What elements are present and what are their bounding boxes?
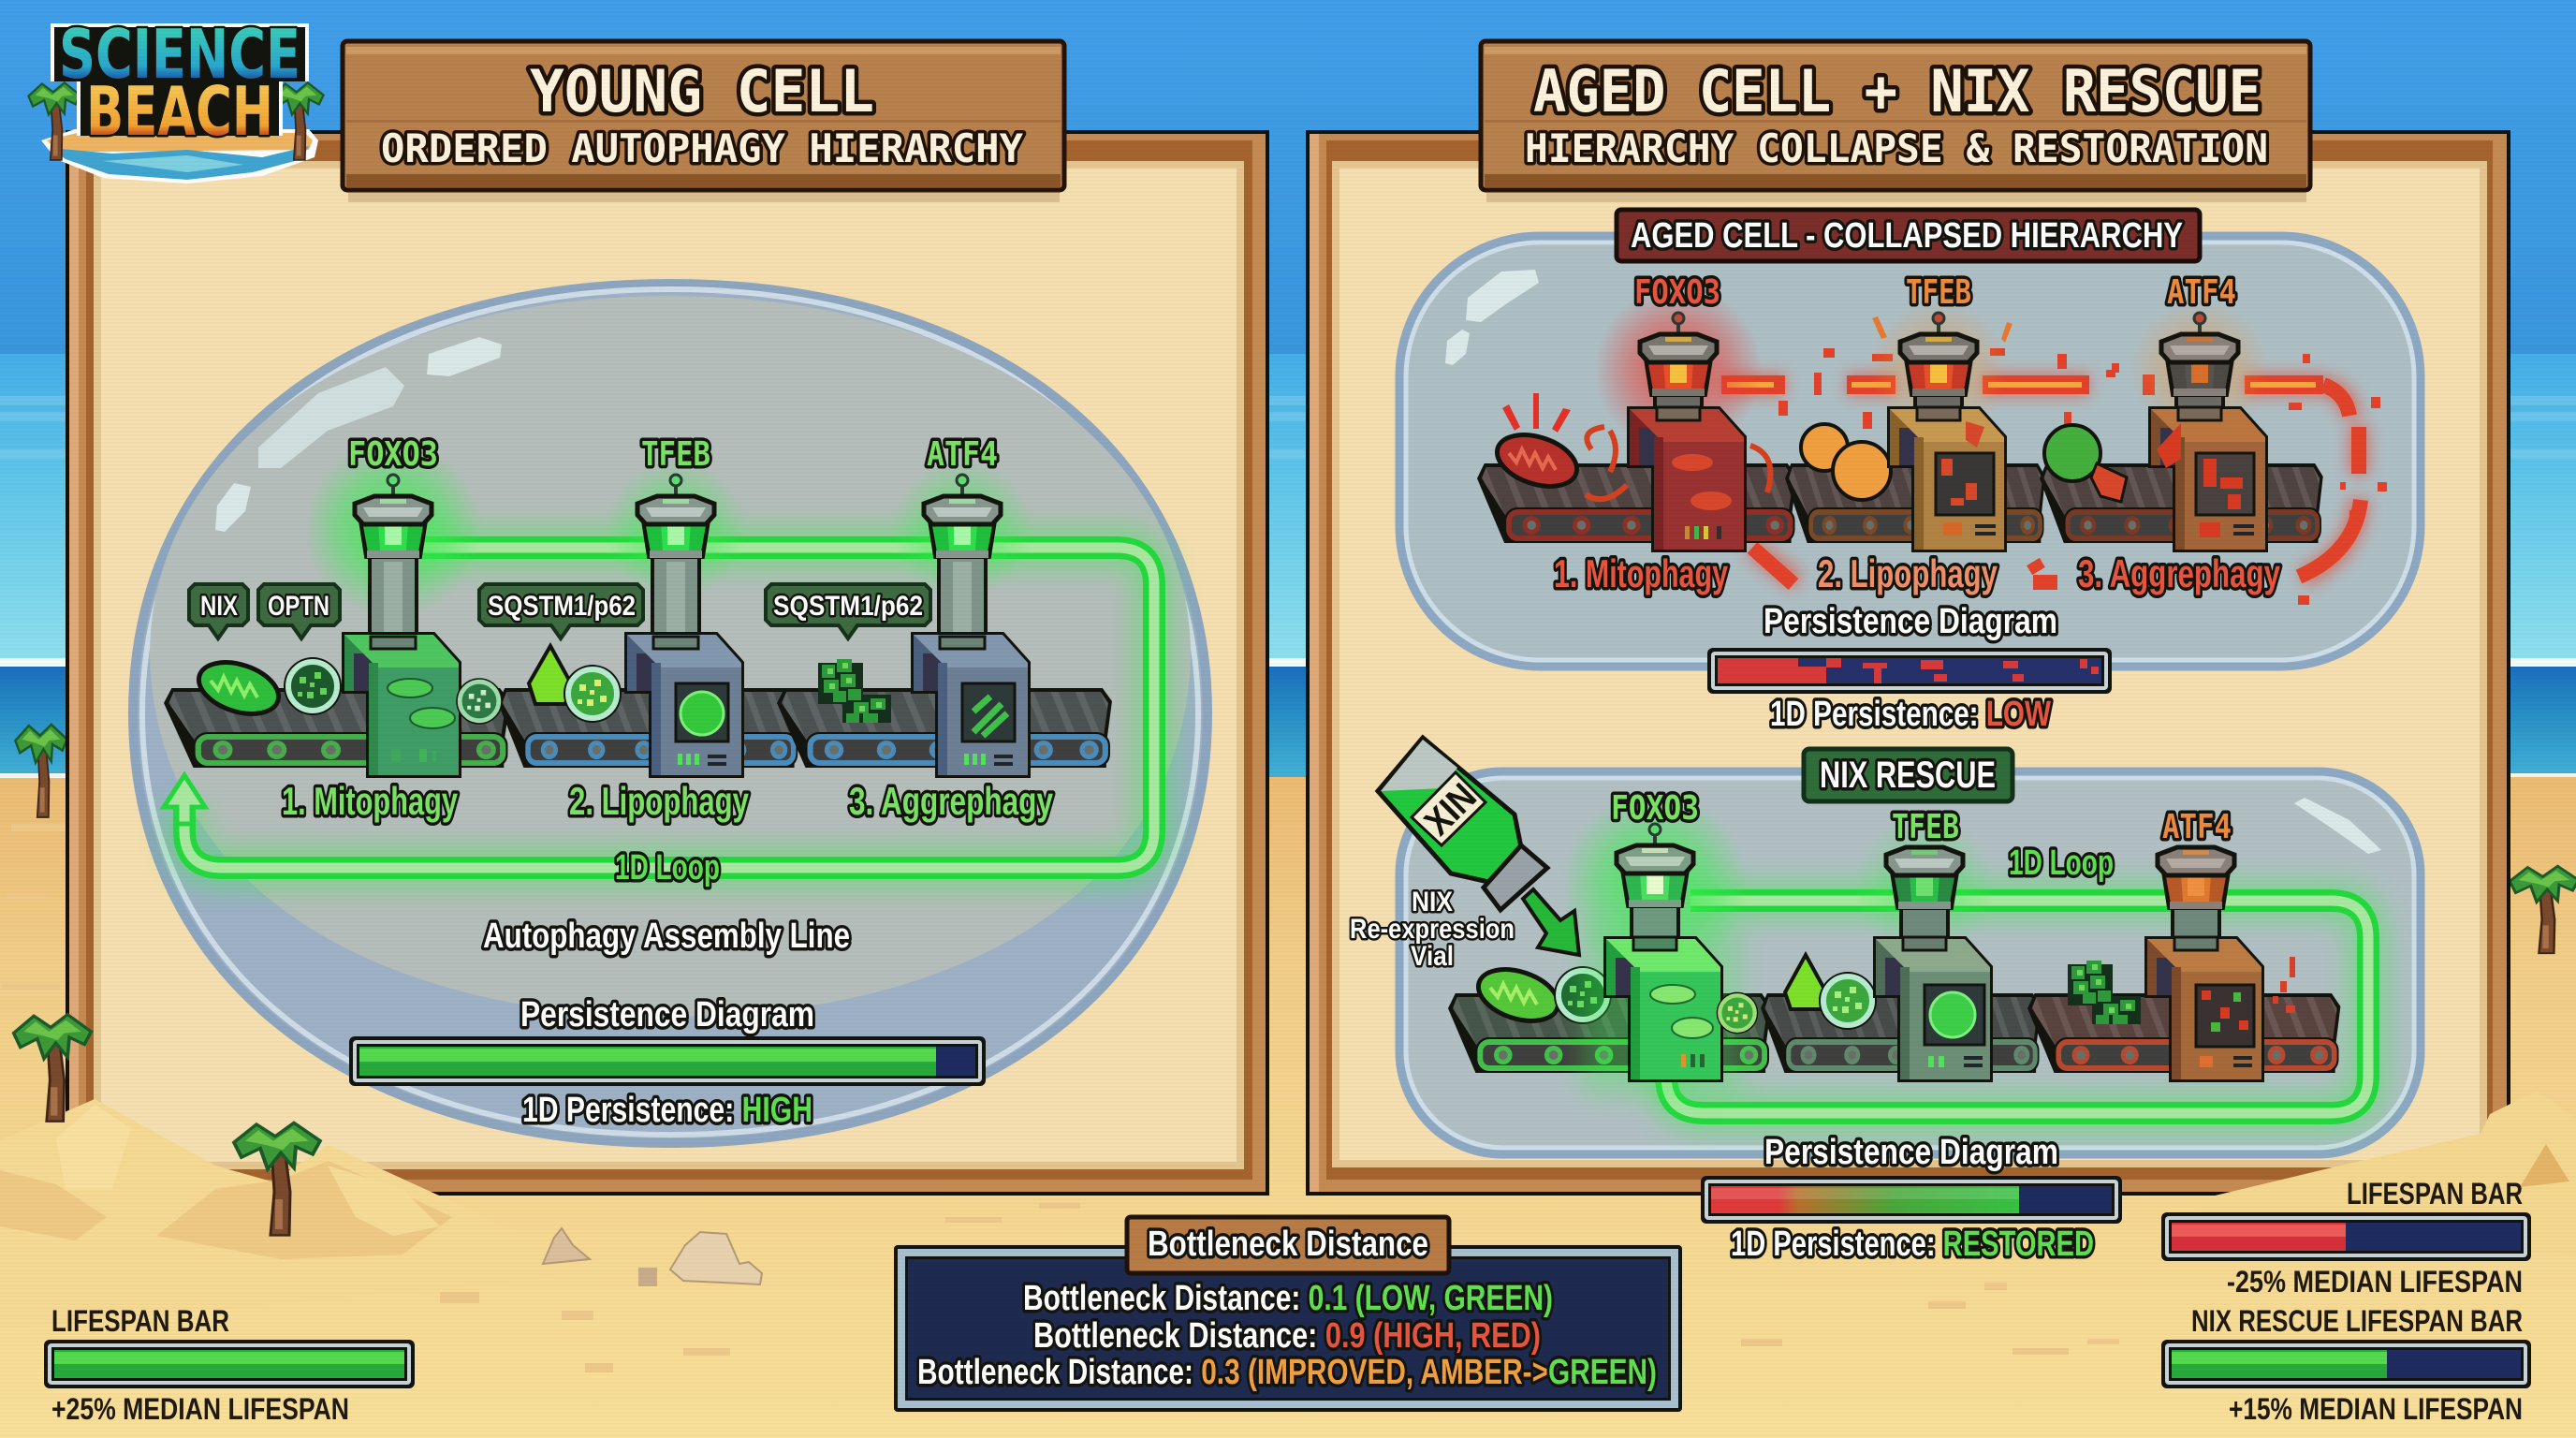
logo: Science Beach: BEACH: [86, 72, 273, 151]
label: assembly line: Autophagy Assembly Line: [483, 917, 850, 956]
alert marks: [1502, 393, 1571, 433]
aggregate cargo: [818, 659, 891, 723]
rescue 1D loop path: [1666, 901, 2368, 1113]
NIX rescue bubble: [1399, 771, 2421, 1154]
background: checker haze bands: [0, 396, 2576, 459]
conveyor: rescue mitophagy: [1448, 993, 1771, 1073]
conveyor: lipophagy: [498, 688, 799, 768]
parchment background: [1336, 165, 2483, 1164]
machine: rescue ATF4: [2147, 847, 2295, 1079]
label: 1D loop: 1D Loop: [615, 848, 720, 888]
lifespan: NIX rescue: [2161, 1304, 2531, 1426]
labels: aged transcription factors: [1634, 273, 2236, 312]
broken vesicle fragments: [1586, 427, 1770, 499]
bottleneck tab: [1127, 1217, 1449, 1273]
callout: SQSTM1/p62 aggrephagy: [766, 584, 930, 638]
orange lipid droplets: [1801, 424, 1891, 500]
persistence: rescue: 1D Persistence: RESTORED: [1731, 1225, 2094, 1264]
rescue aggregate: [2068, 961, 2141, 1024]
conveyor: aged lipophagy: [1785, 463, 2045, 543]
heading: NIX rescue plaque: NIX RESCUE: [1820, 755, 1996, 796]
heading: NIX rescue plaque: [1804, 749, 2012, 801]
labels: autophagy pathways: 2. Lipophagy: [569, 779, 749, 823]
labels: aged pathways: 2. Lipophagy: [1818, 551, 1998, 595]
conveyor: mitophagy: [164, 688, 510, 768]
background: sand: [0, 777, 2576, 1438]
rescue mitochondrion: [1471, 961, 1565, 1030]
heading plank: young cell: YOUNG CELL: [530, 57, 874, 125]
aged cell bubble: [1399, 236, 2421, 667]
labels: transcription factors: [348, 435, 998, 474]
damaged mitochondrion: [1490, 426, 1584, 495]
sparks: [2273, 957, 2295, 1013]
lifespan: young: LIFESPAN BAR: [51, 1304, 229, 1338]
labels: rescue transcription factors: FOXO3: [1611, 789, 1699, 828]
background: horizon glow: [0, 354, 2576, 661]
heading plank: young cell: ORDERED AUTOPHAGY HIERARCHY: [381, 125, 1024, 171]
lifespan: young: [44, 1304, 415, 1426]
logo plate: [51, 23, 309, 136]
persistence: rescue: [1701, 1133, 2122, 1264]
background: sea: [0, 667, 2576, 784]
conveyor: rescue lipophagy: [1761, 993, 2041, 1073]
rescue vesicle: [1554, 966, 1612, 1024]
sand dune: lower right: [2184, 1091, 2576, 1255]
heading: aged cell plaque: AGED CELL - COLLAPSED HIERARCHY: [1631, 216, 2183, 256]
conveyor: aggrephagy: [777, 688, 1112, 768]
labels: aged transcription factors: FOXO3: [1634, 273, 1720, 312]
lipid vesicle cargo: [564, 665, 622, 723]
background: sky: [0, 0, 2576, 354]
label: NIX re-expression vial: Vial: [1411, 941, 1454, 972]
background: sand ripples: [2, 824, 2119, 1372]
bottleneck tab: Bottleneck Distance: [1148, 1225, 1428, 1264]
labels: aged pathways: [1554, 551, 2280, 595]
vesicle cargo: [284, 657, 342, 715]
labels: aged transcription factors: ATF4: [2167, 273, 2236, 312]
background: shore foam: [0, 773, 2576, 778]
logo: Science Beach: SCIENCE: [59, 15, 300, 94]
callout: OPTN: OPTN: [268, 591, 329, 622]
machine: aged FOXO3: [1594, 286, 1763, 550]
persistence bar: low: [1707, 648, 2112, 694]
callout: OPTN: [258, 584, 340, 638]
logo palms: [28, 82, 80, 160]
logo island: [41, 129, 318, 183]
labels: autophagy pathways: 3. Aggrephagy: [849, 779, 1053, 823]
machine: TFEB lipophagy: [606, 459, 746, 775]
labels: aged pathways: 3. Aggrephagy: [2078, 551, 2280, 595]
label: persistence diagram: Persistence Diagram: [520, 995, 814, 1034]
persistence bar: high: [349, 1036, 986, 1086]
panel: aged cell and NIX rescue: [1306, 130, 2510, 1196]
machine: FOXO3 mitophagy: [304, 440, 503, 775]
labels: autophagy pathways: 1. Mitophagy: [282, 779, 458, 823]
lipid droplet cargo: [529, 646, 571, 704]
persistence: rescue: Persistence Diagram: [1764, 1133, 2058, 1172]
label: persistence diagram aged: Persistence Diagram: [1764, 602, 2057, 641]
rocks: [543, 1228, 762, 1286]
heading plank: aged cell + NIX rescue: [1481, 41, 2310, 202]
label: rescue 1D loop: 1D Loop: [2009, 844, 2114, 883]
machine: rescue TFEB: [1854, 814, 1995, 1079]
lifespan: young: +25% MEDIAN LIFESPAN: [51, 1392, 349, 1426]
label: NIX re-expression vial: NIX: [1412, 887, 1453, 917]
labels: rescue transcription factors: TFEB: [1892, 808, 1959, 846]
mitochondrion cargo: [192, 653, 285, 723]
conveyor: aged aggrephagy: [2040, 463, 2323, 543]
label: 1D persistence low: 1D Persistence: LOW: [1770, 695, 2051, 734]
vial cap: [1484, 845, 1547, 910]
lifespan: aged: [2161, 1177, 2531, 1299]
machine: aged ATF4: [2130, 300, 2270, 550]
NIX re-expression vial: [1378, 738, 1547, 910]
bottleneck distance panel: Bottleneck Distance: 0.3 (IMPROVED, AMBER->GREEN): [917, 1353, 1657, 1392]
labels: transcription factors: TFEB: [641, 435, 710, 474]
labels: rescue transcription factors: [1611, 789, 2232, 846]
vial body: [1378, 738, 1521, 882]
labels: aged transcription factors: TFEB: [1906, 273, 1971, 312]
callout: NIX: NIX: [200, 591, 238, 622]
labels: transcription factors: ATF4: [927, 435, 998, 474]
palm tree: left shore: [15, 725, 67, 817]
callout: SQSTM1/p62 lipophagy: [479, 584, 643, 638]
bottleneck distance panel: [894, 1217, 1682, 1412]
logo: Science Beach: [28, 15, 324, 183]
bottleneck distance panel: Bottleneck Distance: 0.1 (LOW, GREEN): [1023, 1279, 1553, 1318]
palm tree: right shore: [2510, 866, 2576, 953]
heading: aged cell plaque: [1617, 210, 2200, 261]
NIX re-expression vial: XIN: [1417, 776, 1485, 844]
callout: SQSTM1/p62 lipophagy: SQSTM1/p62: [488, 591, 636, 622]
vial label: [1412, 772, 1486, 845]
heading plank: aged cell + NIX rescue: HIERARCHY COLLAPSE & RESTORATION: [1525, 125, 2268, 171]
membrane bubble: [133, 284, 1208, 1143]
aggregate with red fragment: [2044, 425, 2127, 502]
panel: young cell: [66, 130, 1269, 1196]
background: foam line: [0, 658, 2576, 667]
labels: transcription factors: FOXO3: [348, 435, 438, 474]
lifespan: aged: -25% MEDIAN LIFESPAN: [2227, 1265, 2523, 1299]
heading plank: young cell: [343, 41, 1064, 202]
machine: ATF4 aggrephagy: [892, 459, 1032, 775]
rescue lipid droplet: [1785, 955, 1826, 1009]
hazard sparks: [1872, 316, 2012, 343]
conveyor: aged mitophagy: [1477, 463, 1796, 543]
arrow: vial into machine: [1523, 889, 1579, 955]
vial air gap: [1381, 740, 1457, 791]
label: NIX re-expression vial: Re-expression: [1350, 914, 1515, 945]
callout: SQSTM1/p62 aggrephagy: SQSTM1/p62: [773, 591, 923, 622]
machine: rescue FOXO3: [1561, 791, 1758, 1095]
label: NIX re-expression vial: [1350, 887, 1515, 972]
wooden frame: [66, 130, 1269, 1196]
1D loop glow path: [164, 548, 1154, 868]
label: 1D persistence high: 1D Persistence: HIGH: [522, 1091, 812, 1130]
labels: aged pathways: 1. Mitophagy: [1554, 551, 1728, 595]
heading plank: aged cell + NIX rescue: AGED CELL + NIX RESCUE: [1533, 57, 2261, 125]
palm tree: dune: [234, 1123, 320, 1235]
labels: rescue transcription factors: ATF4: [2162, 808, 2232, 846]
collapsed broken loop: [1721, 348, 2387, 605]
bottleneck distance panel: Bottleneck Distance: 0.9 (HIGH, RED): [1033, 1316, 1541, 1356]
lifespan: aged: LIFESPAN BAR: [2347, 1177, 2523, 1211]
machine: aged TFEB: [1868, 300, 2012, 550]
sand dune: lower left: [0, 1099, 599, 1329]
parchment background: [97, 165, 1240, 1166]
conveyor: rescue aggrephagy: [2027, 993, 2340, 1073]
rescue lipid vesicle: [1819, 972, 1877, 1030]
callout: NIX: [189, 584, 248, 638]
labels: autophagy pathways: [282, 779, 1053, 823]
palm tree: panel edge: [14, 1015, 91, 1122]
wooden frame: [1306, 130, 2510, 1196]
